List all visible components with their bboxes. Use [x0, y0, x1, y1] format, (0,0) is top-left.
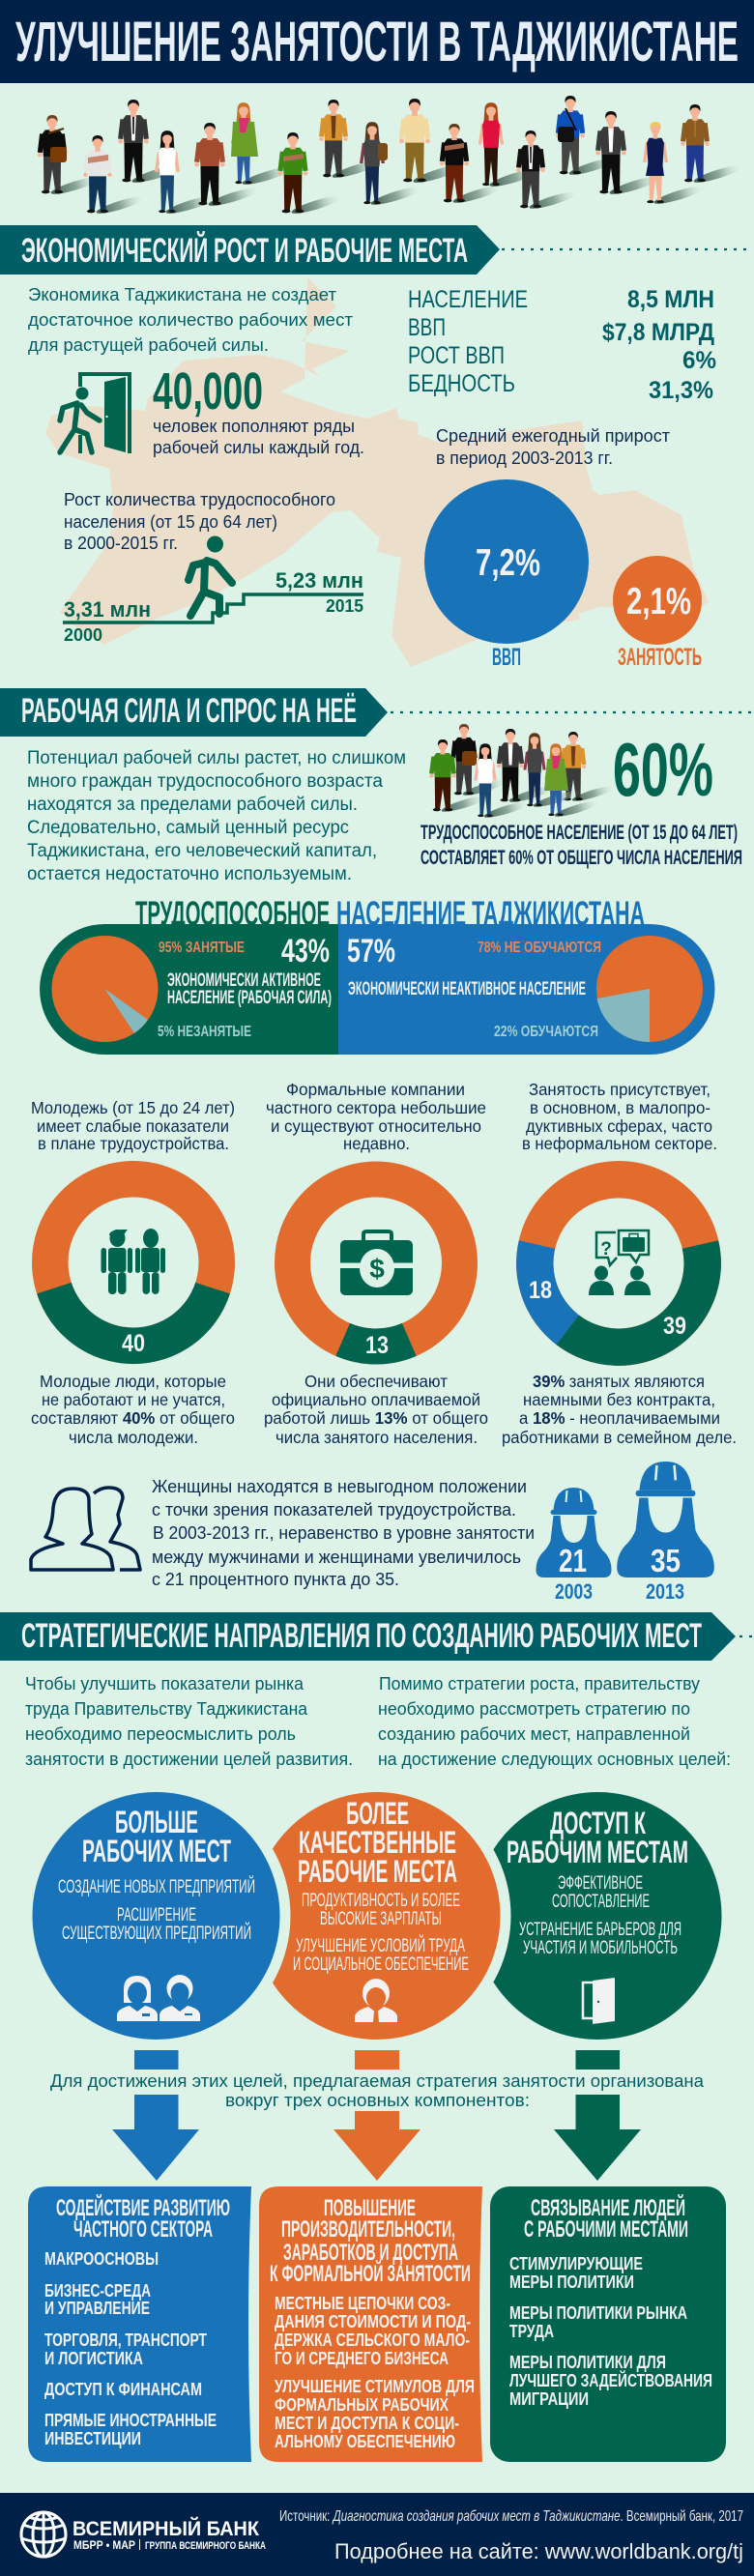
heading: better jobs: БОЛЕЕ — [346, 1796, 409, 1831]
logo: World Bank globe — [21, 2512, 66, 2557]
text: informal employment intro: Занятость присутствует, — [529, 1080, 710, 1099]
heading: working-age population: ТРУДОСПОСОБНОЕ — [135, 895, 330, 933]
text: informal contract finding: 39% занятых являются — [533, 1372, 705, 1391]
list: private sector items: И ЛОГИСТИКА — [44, 2349, 143, 2368]
arrow: orange — [334, 2050, 420, 2181]
arrow: blue — [112, 2050, 199, 2181]
text: better jobs items: ПРОДУКТИВНОСТЬ И БОЛЕЕ — [302, 1891, 460, 1911]
text: women disadvantage: Женщины находятся в невыгодном положении — [152, 1476, 527, 1496]
panel: active and inactive population pill — [40, 924, 714, 1055]
list: connecting people items: МЕРЫ ПОЛИТИКИ РЫНКА — [509, 2303, 687, 2323]
text: strategy right intro: необходимо рассмотреть стратегию по — [378, 1698, 690, 1719]
text: components intro — [50, 2070, 705, 2110]
text: more jobs items: СУЩЕСТВУЮЩИХ ПРЕДПРИЯТИЙ — [62, 1923, 251, 1944]
text: economy intro: для растущей рабочей силы. — [28, 335, 269, 355]
text: labour force paragraph — [27, 748, 406, 884]
text: labour force paragraph: Потенциал рабочей силы растет, но слишком — [27, 748, 406, 768]
heading: better jobs — [298, 1796, 457, 1889]
text: labour force paragraph: много граждан трудоспособного возраста — [27, 771, 383, 792]
text: strategy left intro: занятости в достижении целей развития. — [25, 1749, 353, 1769]
stats table: ВВП — [408, 314, 446, 341]
chart: stairs with climbing person: 2015 — [326, 596, 363, 616]
chart: female workers 21 and 35: 35 — [651, 1543, 681, 1578]
chart: female workers 21 and 35: 2003 — [555, 1579, 593, 1604]
list: productivity items: МЕСТНЫЕ ЦЕПОЧКИ СОЗ- — [275, 2294, 450, 2313]
logo: World Bank wordmark: ГРУППА ВСЕМИРНОГО БАНКА — [145, 2540, 266, 2552]
list: productivity items — [275, 2294, 475, 2451]
heading: more jobs: РАБОЧИХ МЕСТ — [82, 1834, 231, 1868]
heading: better jobs: КАЧЕСТВЕННЫЕ — [299, 1825, 456, 1860]
text: more jobs items: СОЗДАНИЕ НОВЫХ ПРЕДПРИЯТИЙ — [58, 1876, 255, 1897]
list: private sector items: ДОСТУП К ФИНАНСАМ — [44, 2380, 202, 2399]
stats table: БЕДНОСТЬ — [408, 370, 515, 397]
icon: briefcase with dollar — [340, 1231, 413, 1295]
heading: productivity: ПРОИЗВОДИТЕЛЬНОСТИ, — [281, 2216, 455, 2243]
pill labels: ЭКОНОМИЧЕСКИ АКТИВНОЕ — [167, 970, 321, 991]
list: private sector items: БИЗНЕС-СРЕДА — [44, 2281, 151, 2301]
list: connecting people items: МЕРЫ ПОЛИТИКИ ДЛЯ — [509, 2353, 666, 2372]
text: labour force paragraph: находятся за пределами рабочей силы. — [27, 795, 358, 815]
stat: 40,000 people: человек пополняют ряды — [153, 417, 355, 436]
illustration: row of people — [38, 96, 744, 217]
chart: stairs with climbing person — [63, 535, 363, 645]
heading: connecting people — [524, 2194, 688, 2243]
text: informal employment intro: в основном, в малопро- — [530, 1098, 710, 1117]
text: formal pay finding: официально оплачиваемой — [272, 1390, 480, 1409]
stat: 40,000 people: рабочей силы каждый год. — [153, 438, 364, 457]
panel: private sector card — [28, 2186, 251, 2462]
text: formal companies intro: и существуют относительно — [271, 1116, 481, 1136]
text: informal employment intro — [522, 1080, 717, 1153]
logo: World Bank wordmark: МБРР • МАР — [73, 2538, 135, 2552]
chart: stairs with climbing person: 3,31 млн — [64, 597, 151, 622]
text: strategy left intro: Чтобы улучшить показатели рынка — [25, 1673, 304, 1693]
text: youth intro: в плане трудоустройства. — [38, 1134, 229, 1153]
list: connecting people items — [509, 2254, 712, 2409]
heading: better jobs: РАБОЧИЕ МЕСТА — [298, 1854, 457, 1889]
text: access to jobs items — [519, 1873, 682, 1958]
text: informal employment intro: дуктивных сферах, часто — [526, 1116, 712, 1136]
text: better jobs items — [293, 1891, 469, 1975]
chart: GDP vs employment bubbles: в период 2003-2013 гг. — [436, 449, 613, 468]
text: strategy right intro — [378, 1673, 731, 1769]
chart: female workers 21 and 35: 21 — [559, 1543, 587, 1578]
icon: conversation about work — [589, 1230, 651, 1295]
pill labels: 95% ЗАНЯТЫЕ — [159, 940, 245, 956]
text: strategy right intro: созданию рабочих мест, направленной — [378, 1723, 690, 1744]
text: strategy right intro: на достижение следующих основных целей: — [378, 1749, 731, 1769]
text: working-age growth — [64, 490, 335, 553]
text: strategy right intro: Помимо стратегии роста, правительству — [379, 1673, 701, 1693]
section banner: labour force and demand — [0, 688, 752, 737]
list: private sector items: И УПРАВЛЕНИЕ — [44, 2299, 150, 2318]
chart: GDP vs employment bubbles: ВВП — [492, 644, 521, 671]
text: informal contract finding — [502, 1372, 737, 1447]
list: connecting people items: СТИМУЛИРУЮЩИЕ — [509, 2254, 643, 2273]
text: informal contract finding: а 18% - неоплачиваемыми — [519, 1408, 720, 1428]
text: formal companies intro — [266, 1080, 486, 1153]
text: formal pay finding — [264, 1372, 488, 1447]
donut: formal employment 13 — [292, 1179, 460, 1365]
list: connecting people items: МЕРЫ ПОЛИТИКИ — [509, 2272, 634, 2292]
website link text: Подробнее на сайте: www.worldbank.org/tj — [334, 2539, 743, 2563]
list: private sector items: ИНВЕСТИЦИИ — [44, 2429, 141, 2448]
text: formal companies intro: частного сектора небольшие — [266, 1098, 486, 1117]
text: components intro: Для достижения этих целей, предлагаемая стратегия занятости организована — [50, 2070, 705, 2091]
icon: two workers — [117, 1975, 200, 2021]
donut: youth 40 — [37, 1179, 230, 1364]
text: informal contract finding: наемными без контракта, — [523, 1390, 715, 1409]
text: labour force paragraph: Таджикистана, его человеческий капитал, — [27, 841, 377, 861]
footer — [0, 2493, 754, 2576]
list: connecting people items: ТРУДА — [509, 2322, 554, 2341]
donut: informal employment 39 and 18: 39 — [663, 1313, 686, 1340]
text: formal pay finding: работой лишь 13% от общего — [264, 1408, 488, 1428]
donut: youth 40: 40 — [122, 1330, 145, 1357]
text: youth finding: Молодые люди, которые — [40, 1372, 226, 1391]
section banner: labour force and demand: РАБОЧАЯ СИЛА И СПРОС НА НЕЁ — [21, 692, 357, 730]
text: youth intro — [31, 1098, 235, 1153]
list: private sector items: ТОРГОВЛЯ, ТРАНСПОРТ — [44, 2330, 207, 2350]
heading: access to jobs — [507, 1806, 688, 1869]
text: youth finding: числа молодежи. — [69, 1428, 198, 1447]
pie: in education share — [596, 936, 703, 1042]
text: economy intro: Экономика Таджикистана не создает — [28, 285, 336, 304]
chart: GDP vs employment bubbles: Средний ежегодный прирост — [436, 426, 670, 446]
stats table: 31,3% — [649, 377, 713, 404]
heading: more jobs: БОЛЬШЕ — [115, 1805, 198, 1839]
stat: 60% working-age — [420, 727, 742, 869]
pill labels: 43% — [281, 933, 330, 970]
pill labels: НАСЕЛЕНИЕ (РАБОЧАЯ СИЛА) — [167, 988, 332, 1008]
donut: informal employment 39 and 18: 18 — [529, 1277, 552, 1304]
heading: private sector: ЧАСТНОГО СЕКТОРА — [73, 2216, 213, 2243]
list: private sector items — [44, 2249, 217, 2448]
section banner: economic growth: ЭКОНОМИЧЕСКИЙ РОСТ И РАБОЧИЕ МЕСТА — [21, 231, 468, 270]
heading: productivity: ЗАРАБОТКОВ И ДОСТУПА — [283, 2240, 458, 2266]
pie: employed share — [52, 936, 159, 1042]
icon: person walking through door — [60, 372, 131, 453]
list: private sector items: ПРЯМЫЕ ИНОСТРАННЫЕ — [44, 2411, 217, 2430]
chart: GDP vs employment bubbles: 2,1% — [626, 581, 691, 622]
list: productivity items: ФОРМАЛЬНЫХ РАБОЧИХ — [275, 2395, 449, 2415]
text: women disadvantage: с 21 процентного пункта до 35. — [152, 1569, 399, 1589]
text: youth finding: не работают и не учатся, — [42, 1390, 225, 1409]
list: productivity items: ДЕРЖКА СЕЛЬСКОГО МАЛО- — [275, 2330, 470, 2350]
stats table: НАСЕЛЕНИЕ — [408, 286, 528, 313]
stats table: 6% — [682, 347, 716, 374]
donut: informal employment 39 and 18 — [516, 1179, 721, 1366]
text: formal companies intro: недавно. — [343, 1134, 410, 1153]
heading: productivity: ПОВЫШЕНИЕ — [324, 2195, 416, 2221]
icon: briefcase with dollar: $ — [369, 1254, 385, 1284]
heading: private sector: СОДЕЙСТВИЕ РАЗВИТИЮ — [56, 2194, 230, 2221]
list: productivity items: АЛЬНОМУ ОБЕСПЕЧЕНИЮ — [275, 2432, 455, 2451]
text: strategy left intro: труда Правительству Таджикистана — [25, 1698, 308, 1719]
icon: conversation about work: ? — [600, 1239, 612, 1259]
arrow: green — [554, 2050, 641, 2181]
text: economy intro: достаточное количество рабочих мест — [28, 310, 353, 330]
text: women disadvantage: с точки зрения показателей трудоустройства. — [152, 1499, 516, 1520]
text: working-age growth: в 2000-2015 гг. — [64, 534, 178, 553]
pill labels: 5% НЕЗАНЯТЫЕ — [158, 1024, 251, 1040]
logo: World Bank wordmark: ВСЕМИРНЫЙ БАНК — [72, 2517, 259, 2540]
pill labels: 22% ОБУЧАЮТСЯ — [494, 1024, 598, 1040]
text: more jobs items — [58, 1876, 255, 1944]
text: informal contract finding: работниками в семейном деле. — [502, 1428, 737, 1447]
list: private sector items: МАКРООСНОВЫ — [44, 2249, 159, 2269]
stats table: РОСТ ВВП — [408, 342, 505, 369]
text: women disadvantage: между мужчинами и женщинами увеличилось — [152, 1547, 521, 1567]
text: working-age growth: населения (от 15 до 64 лет) — [64, 512, 277, 532]
list: productivity items: МЕСТ И ДОСТУПА К СОЦИ- — [275, 2414, 459, 2433]
chart: stairs with climbing person: 5,23 млн — [276, 568, 363, 593]
stats table — [408, 286, 716, 404]
text: informal employment intro: в неформальном секторе. — [522, 1134, 717, 1153]
icon: door — [583, 1978, 615, 2024]
text: strategy left intro: необходимо переосмыслить роль — [25, 1723, 296, 1744]
heading: more jobs — [82, 1805, 231, 1868]
heading: access to jobs: ДОСТУП К — [550, 1806, 646, 1840]
map of Tajikistan — [45, 277, 709, 667]
list: productivity items: УЛУЧШЕНИЕ СТИМУЛОВ ДЛЯ — [275, 2377, 475, 2396]
text: women disadvantage: В 2003-2013 гг., неравенство в уровне занятости — [153, 1522, 535, 1543]
pill labels: 57% — [347, 933, 395, 970]
stat: 40,000 people: 40,000 — [153, 362, 263, 420]
chart: GDP vs employment bubbles — [424, 426, 702, 671]
text: components intro: вокруг трех основных компонентов: — [225, 2090, 530, 2110]
text: youth intro: имеет слабые показатели — [37, 1116, 229, 1136]
text: more jobs items: РАСШИРЕНИЕ — [117, 1905, 196, 1925]
text: economy intro — [28, 285, 353, 355]
chart: female workers 21 and 35 — [536, 1462, 714, 1604]
panel: connecting people card — [490, 2186, 726, 2462]
list: connecting people items: МИГРАЦИИ — [509, 2389, 589, 2409]
icon: manager — [355, 1979, 397, 2022]
list: productivity items: ДАНИЯ СТОИМОСТИ И ПОД- — [275, 2312, 471, 2331]
text: women disadvantage — [152, 1476, 535, 1589]
heading: working-age population — [135, 895, 645, 933]
text: youth intro: Молодежь (от 15 до 24 лет) — [31, 1098, 235, 1117]
panel: access to jobs circle — [242, 1781, 721, 2050]
text: formal pay finding: Они обеспечивают — [304, 1372, 448, 1391]
logo: World Bank wordmark — [72, 2517, 266, 2552]
heading: productivity — [270, 2195, 471, 2287]
stats table: $7,8 МЛРД — [602, 319, 714, 346]
heading: private sector — [56, 2194, 230, 2243]
chart: female workers 21 and 35: 2013 — [646, 1579, 684, 1604]
icon: two women outline — [31, 1488, 140, 1570]
text: labour force paragraph: Следовательно, самый ценный ресурс — [27, 818, 349, 838]
text: formal pay finding: числа занятого населения. — [276, 1428, 478, 1447]
stats table: 8,5 МЛН — [627, 286, 714, 313]
stat: 40,000 people — [153, 362, 364, 457]
icon: young people — [101, 1229, 165, 1294]
list: productivity items: ГО И СРЕДНЕГО БИЗНЕСА — [275, 2349, 449, 2368]
chart: stairs with climbing person: 2000 — [64, 625, 102, 645]
text: access to jobs items: СОПОСТАВЛЕНИЕ — [552, 1892, 650, 1912]
text: better jobs items: УЛУЧШЕНИЕ УСЛОВИЙ ТРУДА — [296, 1935, 465, 1956]
panel: productivity card — [259, 2186, 482, 2462]
text: access to jobs items: ЭФФЕКТИВНОЕ — [558, 1873, 643, 1894]
panel: better jobs circle — [21, 1781, 501, 2050]
heading: productivity: К ФОРМАЛЬНОЙ ЗАНЯТОСТИ — [270, 2260, 471, 2287]
donut: formal employment 13: 13 — [365, 1332, 389, 1359]
text: better jobs items: ВЫСОКИЕ ЗАРПЛАТЫ — [320, 1909, 442, 1929]
pill labels: ЭКОНОМИЧЕСКИ НЕАКТИВНОЕ НАСЕЛЕНИЕ — [348, 979, 586, 999]
illustration: group of people — [429, 724, 617, 821]
text: formal companies intro: Формальные компании — [286, 1080, 465, 1099]
text: youth finding — [31, 1372, 235, 1447]
pill labels — [158, 933, 601, 1040]
chart: GDP vs employment bubbles: 7,2% — [476, 542, 540, 584]
text: better jobs items: И СОЦИАЛЬНОЕ ОБЕСПЕЧЕНИЕ — [293, 1954, 469, 1975]
pill labels: 78% НЕ ОБУЧАЮТСЯ — [478, 940, 601, 956]
text: working-age growth: Рост количества трудоспособного — [64, 490, 335, 509]
text: strategy left intro — [25, 1673, 353, 1769]
text: labour force paragraph: остается недостаточно используемым. — [27, 864, 352, 884]
text: youth finding: составляют 40% от общего — [31, 1408, 235, 1428]
panel: more jobs circle — [33, 1792, 280, 2040]
